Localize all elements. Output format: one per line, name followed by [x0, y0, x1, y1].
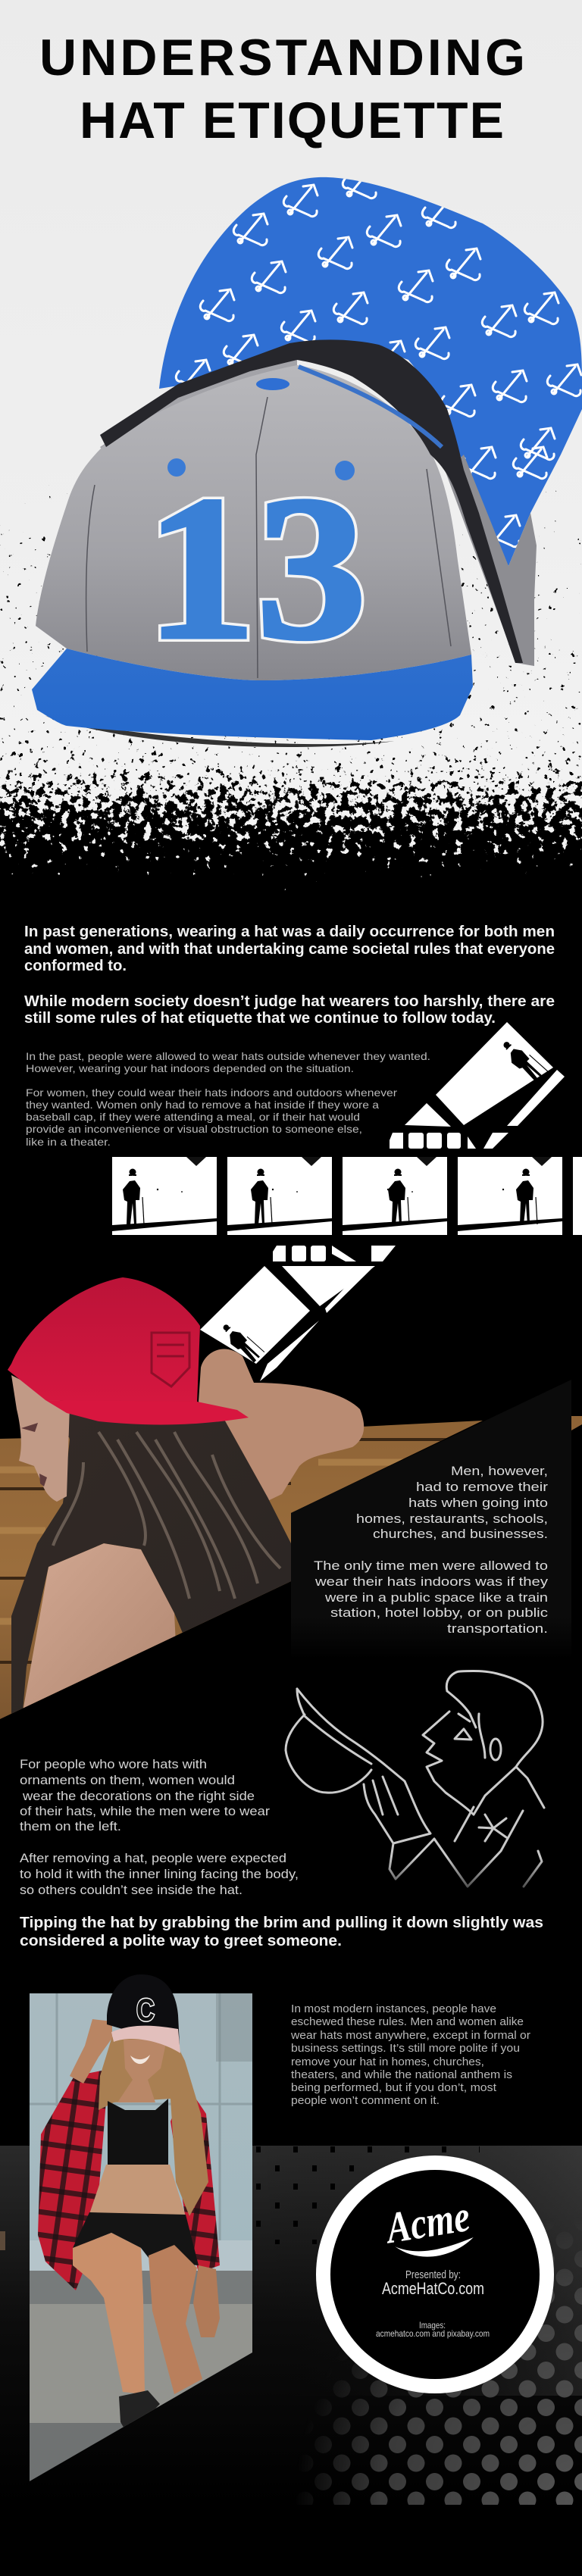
panel: men hat rules: homes, restaurants, schools, [356, 1512, 548, 1526]
text: modern hat etiquette: wear hats most anywhere, except in formal or [290, 2029, 530, 2042]
panel: men hat rules: wear their hats indoors was if they [314, 1574, 549, 1589]
badge: Acme presented by [316, 2156, 554, 2393]
intro text: still some rules of hat etiquette that we continue to follow today. [24, 1010, 496, 1027]
visor [32, 649, 473, 740]
title: UNDERSTANDING [39, 29, 525, 86]
text: modern hat etiquette: In most modern instances, people have [291, 2002, 496, 2015]
top button [256, 378, 289, 390]
text: women hat rules: For women, they could wear their hats indoors and outdoors whenever [26, 1086, 397, 1099]
ink splatter: dense edge [0, 758, 582, 902]
cap letter C: C [136, 1992, 155, 2027]
text: hat ornaments and holding: wear the decorations on the right side [22, 1789, 255, 1803]
hair [99, 2037, 208, 2216]
raised arm and hand [70, 2019, 112, 2084]
text: hat ornaments and holding [20, 1757, 299, 1897]
shorts [73, 2212, 199, 2265]
lower diagonal figure [218, 1318, 264, 1365]
panel: men hat rules: had to remove their [416, 1480, 548, 1494]
icon: blue snapback cap with 13 [32, 167, 582, 747]
cap underbrim [111, 2026, 180, 2053]
bottom sprockets [273, 1246, 396, 1261]
text: women hat rules: In the past, people were allowed to wear hats outside whenever they wanted. [26, 1050, 430, 1062]
text: women hat rules: like in a theater. [26, 1136, 111, 1148]
pale ledge [30, 2240, 252, 2272]
solid black under splatter [0, 898, 582, 921]
lower diagonal frames [200, 1266, 375, 1381]
smile [130, 2055, 150, 2064]
upper diagonal figure [498, 1036, 548, 1086]
shirt [38, 2071, 106, 2290]
icon: line art gentleman tipping hat [286, 1671, 544, 1887]
hair [11, 1402, 291, 1720]
horizontal film frames [112, 1157, 582, 1235]
face [11, 1375, 70, 1502]
text: women hat rules: they wanted. Women only had to remove a hat inside if they wore a [26, 1099, 379, 1111]
ink splatter: sparse specks [0, 470, 582, 833]
right leg [149, 2245, 202, 2394]
image credit: acmehatco.com and pixabay.com [376, 2328, 490, 2339]
text: women hat rules [26, 1050, 430, 1148]
website: AcmeHatCo.com [382, 2279, 484, 2298]
black top [108, 2099, 168, 2165]
intro text [24, 924, 555, 1027]
presented by: Presented by: [405, 2268, 461, 2281]
panel: men hat rules: transportation. [447, 1621, 548, 1636]
embroidered 13: 13 [146, 454, 367, 682]
dark ledge [30, 2271, 252, 2304]
left leg [73, 2233, 145, 2394]
crown seams [86, 397, 451, 678]
wall [30, 1993, 252, 2243]
grey flap under band [100, 356, 297, 455]
text: modern hat etiquette: eschewed these rules. Men and women alike [291, 2015, 524, 2028]
panel: men hat rules: The only time men were allowed to [314, 1558, 548, 1573]
upper diagonal frames [405, 1022, 565, 1127]
text: modern hat etiquette: remove your hat in homes, churches, [291, 2055, 484, 2068]
underside of raised brim [159, 177, 582, 566]
text: modern hat etiquette [290, 2002, 530, 2107]
footer halftone background [0, 2146, 582, 2505]
intro text: conformed to. [24, 958, 127, 974]
panel: men hat rules [291, 1380, 582, 1659]
text: modern hat etiquette: theaters, and while the national anthem is [291, 2068, 512, 2081]
red cap logo [152, 1333, 189, 1386]
anchor pattern [176, 167, 581, 547]
text: hat ornaments and holding: so others couldn’t see inside the hat. [20, 1883, 242, 1897]
raised arm [199, 1349, 364, 1504]
panel: men hat rules: were in a public space like a train [324, 1590, 548, 1605]
film strip illustration [112, 1022, 582, 1381]
panel: men hat rules: hats when going into [408, 1496, 548, 1510]
lips and eye [21, 1423, 47, 1487]
concrete [30, 2304, 252, 2423]
white ring [316, 2156, 554, 2393]
embroidered 13: 13 [146, 454, 367, 682]
text: modern hat etiquette: people won’t comment on it. [291, 2094, 440, 2107]
callout: tipping the hat: considered a polite way to greet someone. [20, 1933, 342, 1949]
intro text: In past generations, wearing a hat was a daily occurrence for both men [24, 924, 555, 940]
top sprockets [390, 1133, 508, 1149]
wood background [0, 1417, 485, 1720]
text: hat ornaments and holding: For people who wore hats with [20, 1757, 207, 1771]
grey side panel [446, 455, 537, 666]
panel: men hat rules: churches, and businesses. [373, 1527, 548, 1541]
text: hat ornaments and holding: of their hats, while the men were to wear [20, 1804, 270, 1818]
eyelets [167, 458, 186, 477]
text: hat ornaments and holding: to hold it with the inner lining facing the body, [20, 1867, 299, 1881]
text: modern hat etiquette: business settings. It’s still more polite if you [291, 2042, 520, 2055]
hero background: light grey [0, 0, 582, 898]
black cap crown [107, 1974, 180, 2046]
panel: men hat rules: station, hotel lobby, or on public [330, 1605, 549, 1620]
panel: woman in plaid shirt with black cap [30, 1974, 252, 2484]
dark sweatband [100, 339, 523, 663]
red cap brim [45, 1400, 249, 1424]
text: women hat rules: However, wearing your hat indoors depended on the situation. [26, 1062, 354, 1074]
text: women hat rules: provide an inconvenience or visual obstruction to someone else, [26, 1123, 362, 1135]
visor shadow [45, 716, 394, 747]
sneaker [119, 2390, 160, 2428]
midriff [89, 2165, 186, 2216]
face and neck [117, 2040, 167, 2102]
title: HAT ETIQUETTE [80, 92, 504, 149]
hand on ledge [193, 2265, 220, 2337]
image credit label: Images: [419, 2320, 446, 2331]
Acme logo: Acme [381, 2191, 473, 2253]
title [39, 29, 525, 149]
callout: tipping the hat: Tipping the hat by grabbing the brim and pulling it down slightly was [20, 1915, 543, 1931]
red cap crown [8, 1277, 200, 1403]
text: hat ornaments and holding: After removing a hat, people were expected [20, 1851, 286, 1865]
Acme logo [381, 2191, 475, 2263]
text: modern hat etiquette: being performed, but if you don’t, most [291, 2081, 497, 2094]
text: hat ornaments and holding: them on the left. [20, 1819, 121, 1834]
panel: men hat rules: Men, however, [451, 1464, 548, 1478]
crown [36, 365, 471, 680]
black disc [330, 2170, 540, 2379]
blue inner strip [299, 367, 442, 447]
panel: woman in red cap [0, 1277, 485, 1720]
callout: tipping the hat [20, 1915, 543, 1949]
text: women hat rules: baseball cap, if they were attending a meal, or if their hat would [26, 1111, 360, 1123]
intro text: and women, and with that undertaking came societal rules that everyone [24, 941, 555, 958]
hair highlights [53, 1432, 280, 1599]
text: hat ornaments and holding: ornaments on them, women would [20, 1773, 235, 1787]
intro text: While modern society doesn’t judge hat wearers too harshly, there are [24, 993, 555, 1010]
bare back [22, 1543, 176, 1716]
